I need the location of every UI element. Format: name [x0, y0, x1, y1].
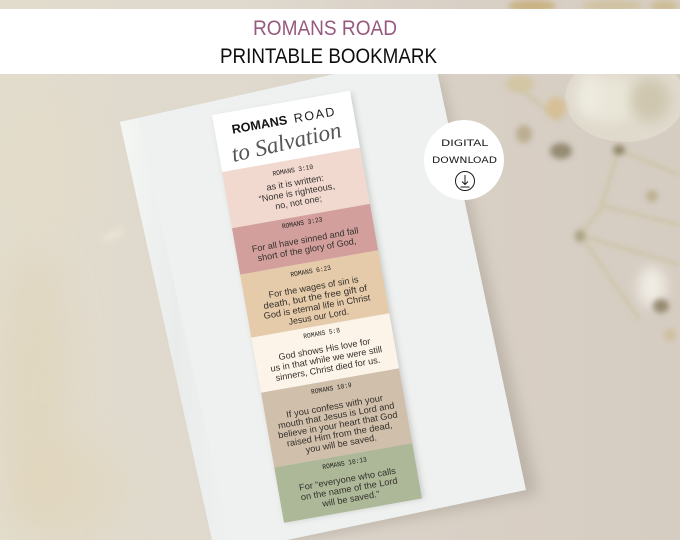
- panel: Romans 6:23: ROMANS 6:23: [290, 265, 332, 280]
- panel: Romans 5:8: us in that while we were still: [270, 344, 383, 374]
- book: [120, 52, 538, 540]
- panel: Romans 3:23: For all have sinned and fall: [251, 225, 359, 254]
- panel: Romans 6:23: God is eternal life in Christ: [263, 292, 372, 321]
- panel: Romans 3:10: as it is written:: [266, 173, 324, 193]
- badge: digital download: DIGITAL: [441, 139, 488, 149]
- badge: digital download: [424, 120, 504, 200]
- panel: Romans 6:23: [240, 250, 389, 338]
- panel: Romans 3:23: short of the glory of God,: [257, 236, 357, 263]
- badge: digital download: DOWNLOAD: [432, 156, 497, 166]
- panel: Romans 3:10: “None is righteous,: [258, 181, 336, 204]
- panel: Romans 6:23: death, but the free gift of: [263, 283, 368, 311]
- panel: Romans 10:13: For “everyone who calls: [298, 466, 397, 493]
- panel: Romans 10:9: believe in your heart that God: [277, 409, 398, 440]
- panel: Romans 10:9: raised Him from the dead,: [286, 420, 393, 449]
- panel: Romans 3:23: [232, 204, 378, 275]
- panel: title: [212, 91, 360, 172]
- book spine: [120, 120, 156, 282]
- panel: Romans 5:8: sinners, Christ died for us.: [275, 355, 381, 383]
- panel: Romans 3:23: ROMANS 3:23: [281, 216, 323, 231]
- panel: Romans 10:13: will be saved.”: [320, 489, 380, 509]
- panel: Romans 5:8: God shows His love for: [278, 336, 371, 362]
- panel: Romans 6:23: For the wages of sin is: [268, 274, 360, 300]
- bookmark: [212, 90, 424, 523]
- panel: Romans 5:8: [251, 313, 399, 393]
- panel: title: ROAD: [293, 105, 336, 126]
- panel: Romans 3:10: no, not one;: [275, 193, 323, 211]
- panel: Romans 10:13: on the name of the Lord: [300, 475, 398, 502]
- panel: Romans 5:8: ROMANS 5:8: [303, 327, 341, 341]
- panel: Romans 10:9: mouth that Jesus is Lord and: [277, 400, 395, 431]
- panel: Romans 10:13: ROMANS 10:13: [322, 456, 368, 472]
- panel: Romans 3:10: [222, 148, 370, 228]
- icon: download: [456, 172, 474, 190]
- panel: Romans 10:13: [274, 443, 422, 523]
- heading: Printable Bookmark: PRINTABLE BOOKMARK: [220, 45, 437, 68]
- panel: Romans 10:9: [261, 368, 412, 468]
- panel: Romans 10:9: ROMANS 10:9: [311, 382, 352, 397]
- panel: Romans 10:9: If you confess with your: [285, 393, 384, 420]
- heading: Romans Road: ROMANS ROAD: [253, 17, 397, 40]
- panel: title: to Salvation: [229, 117, 344, 167]
- title band: [0, 9, 680, 74]
- panel: Romans 3:10: ROMANS 3:10: [272, 164, 314, 179]
- blurred dried flowers: [506, 0, 680, 342]
- panel: Romans 10:9: you will be saved.: [305, 432, 377, 455]
- background photo: [0, 228, 124, 519]
- panel: title: ROMANS: [231, 113, 288, 137]
- panel: Romans 6:23: Jesus our Lord.: [288, 306, 350, 327]
